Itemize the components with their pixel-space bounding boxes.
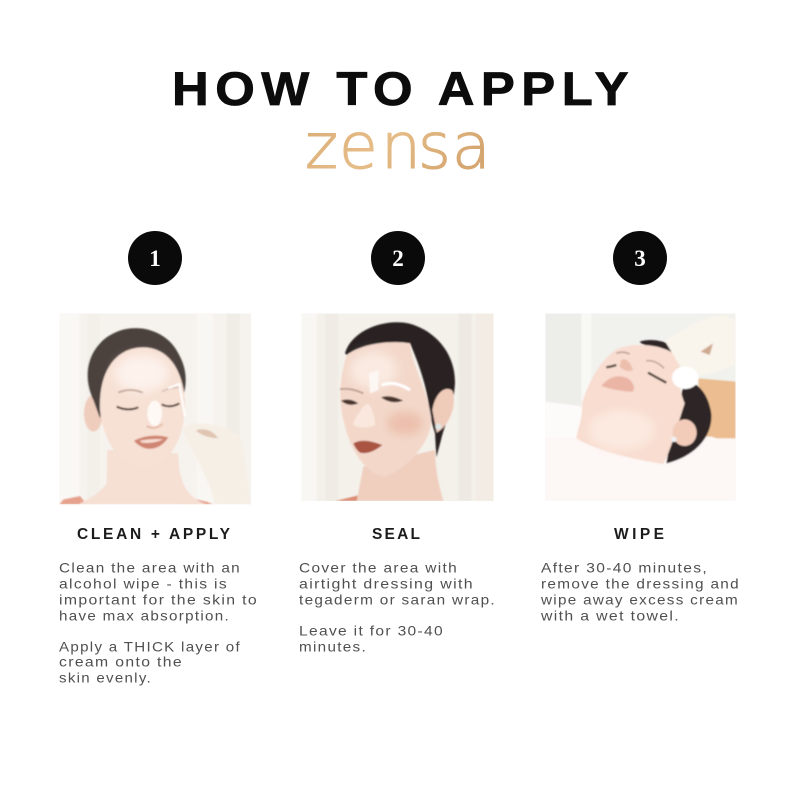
text block: step 1 instructions: alcohol wipe - this is bbox=[59, 576, 228, 592]
glove and cotton bbox=[664, 319, 724, 374]
text block: step 3 instructions bbox=[540, 560, 740, 624]
step number 1: 1 bbox=[149, 246, 161, 271]
step number 3: 3 bbox=[634, 246, 646, 271]
text block: step 2 instructions: minutes. bbox=[299, 638, 367, 654]
lips bbox=[134, 436, 168, 449]
heading: wipe: WIPE bbox=[614, 526, 664, 543]
gloved hand bbox=[196, 424, 214, 496]
text block: step 1 instructions bbox=[59, 560, 258, 686]
lips bbox=[601, 376, 634, 392]
closed eyes bbox=[648, 373, 666, 383]
heading: clean + apply: CLEAN + APPLY bbox=[77, 526, 231, 543]
text block: step 1 instructions: cream onto the bbox=[59, 654, 183, 670]
eyes bbox=[381, 396, 403, 402]
text block: step 2 instructions: Leave it for 30-40 bbox=[299, 622, 444, 638]
nose bbox=[353, 403, 375, 427]
text block: step 2 instructions bbox=[299, 560, 496, 654]
ear bbox=[673, 419, 697, 446]
text block: step 3 instructions: remove the dressing and bbox=[541, 576, 740, 592]
eyebrows and eyes bbox=[118, 390, 143, 393]
text block: step 3 instructions: After 30-40 minutes, bbox=[541, 560, 708, 576]
text block: step 3 instructions: wipe away excess cream bbox=[540, 592, 739, 608]
nose cream bbox=[147, 401, 162, 426]
text block: step 1 instructions: Apply a THICK layer of bbox=[59, 638, 241, 654]
photo: seal bbox=[302, 313, 494, 501]
cream strip bbox=[168, 384, 185, 417]
photo: wipe bbox=[545, 313, 736, 501]
heading: seal: SEAL bbox=[372, 526, 420, 543]
text block: step 2 instructions: tegaderm or saran wrap. bbox=[299, 592, 496, 608]
nose bbox=[620, 359, 633, 371]
text block: step 1 instructions: have max absorption. bbox=[59, 608, 230, 624]
step number 2 bbox=[371, 231, 425, 285]
step number 1 bbox=[128, 231, 182, 285]
step number 2: 2 bbox=[392, 246, 404, 271]
title: HOW TO APPLY bbox=[172, 62, 635, 115]
shoulders bbox=[59, 496, 213, 504]
ear bbox=[432, 389, 454, 433]
dressing on brow bbox=[369, 370, 378, 393]
lips bbox=[353, 441, 382, 453]
text block: step 1 instructions: skin evenly. bbox=[59, 670, 152, 686]
logo: zensa: zensa bbox=[305, 110, 491, 183]
text block: step 1 instructions: important for the skin to bbox=[59, 592, 258, 608]
text block: step 2 instructions: airtight dressing with bbox=[299, 576, 474, 592]
step number 3 bbox=[613, 231, 667, 285]
text block: step 2 instructions: Cover the area with bbox=[299, 560, 458, 576]
text block: step 3 instructions: with a wet towel. bbox=[540, 608, 680, 624]
text block: step 1 instructions: Clean the area with an bbox=[59, 560, 241, 576]
photo: clean and apply bbox=[59, 313, 251, 504]
